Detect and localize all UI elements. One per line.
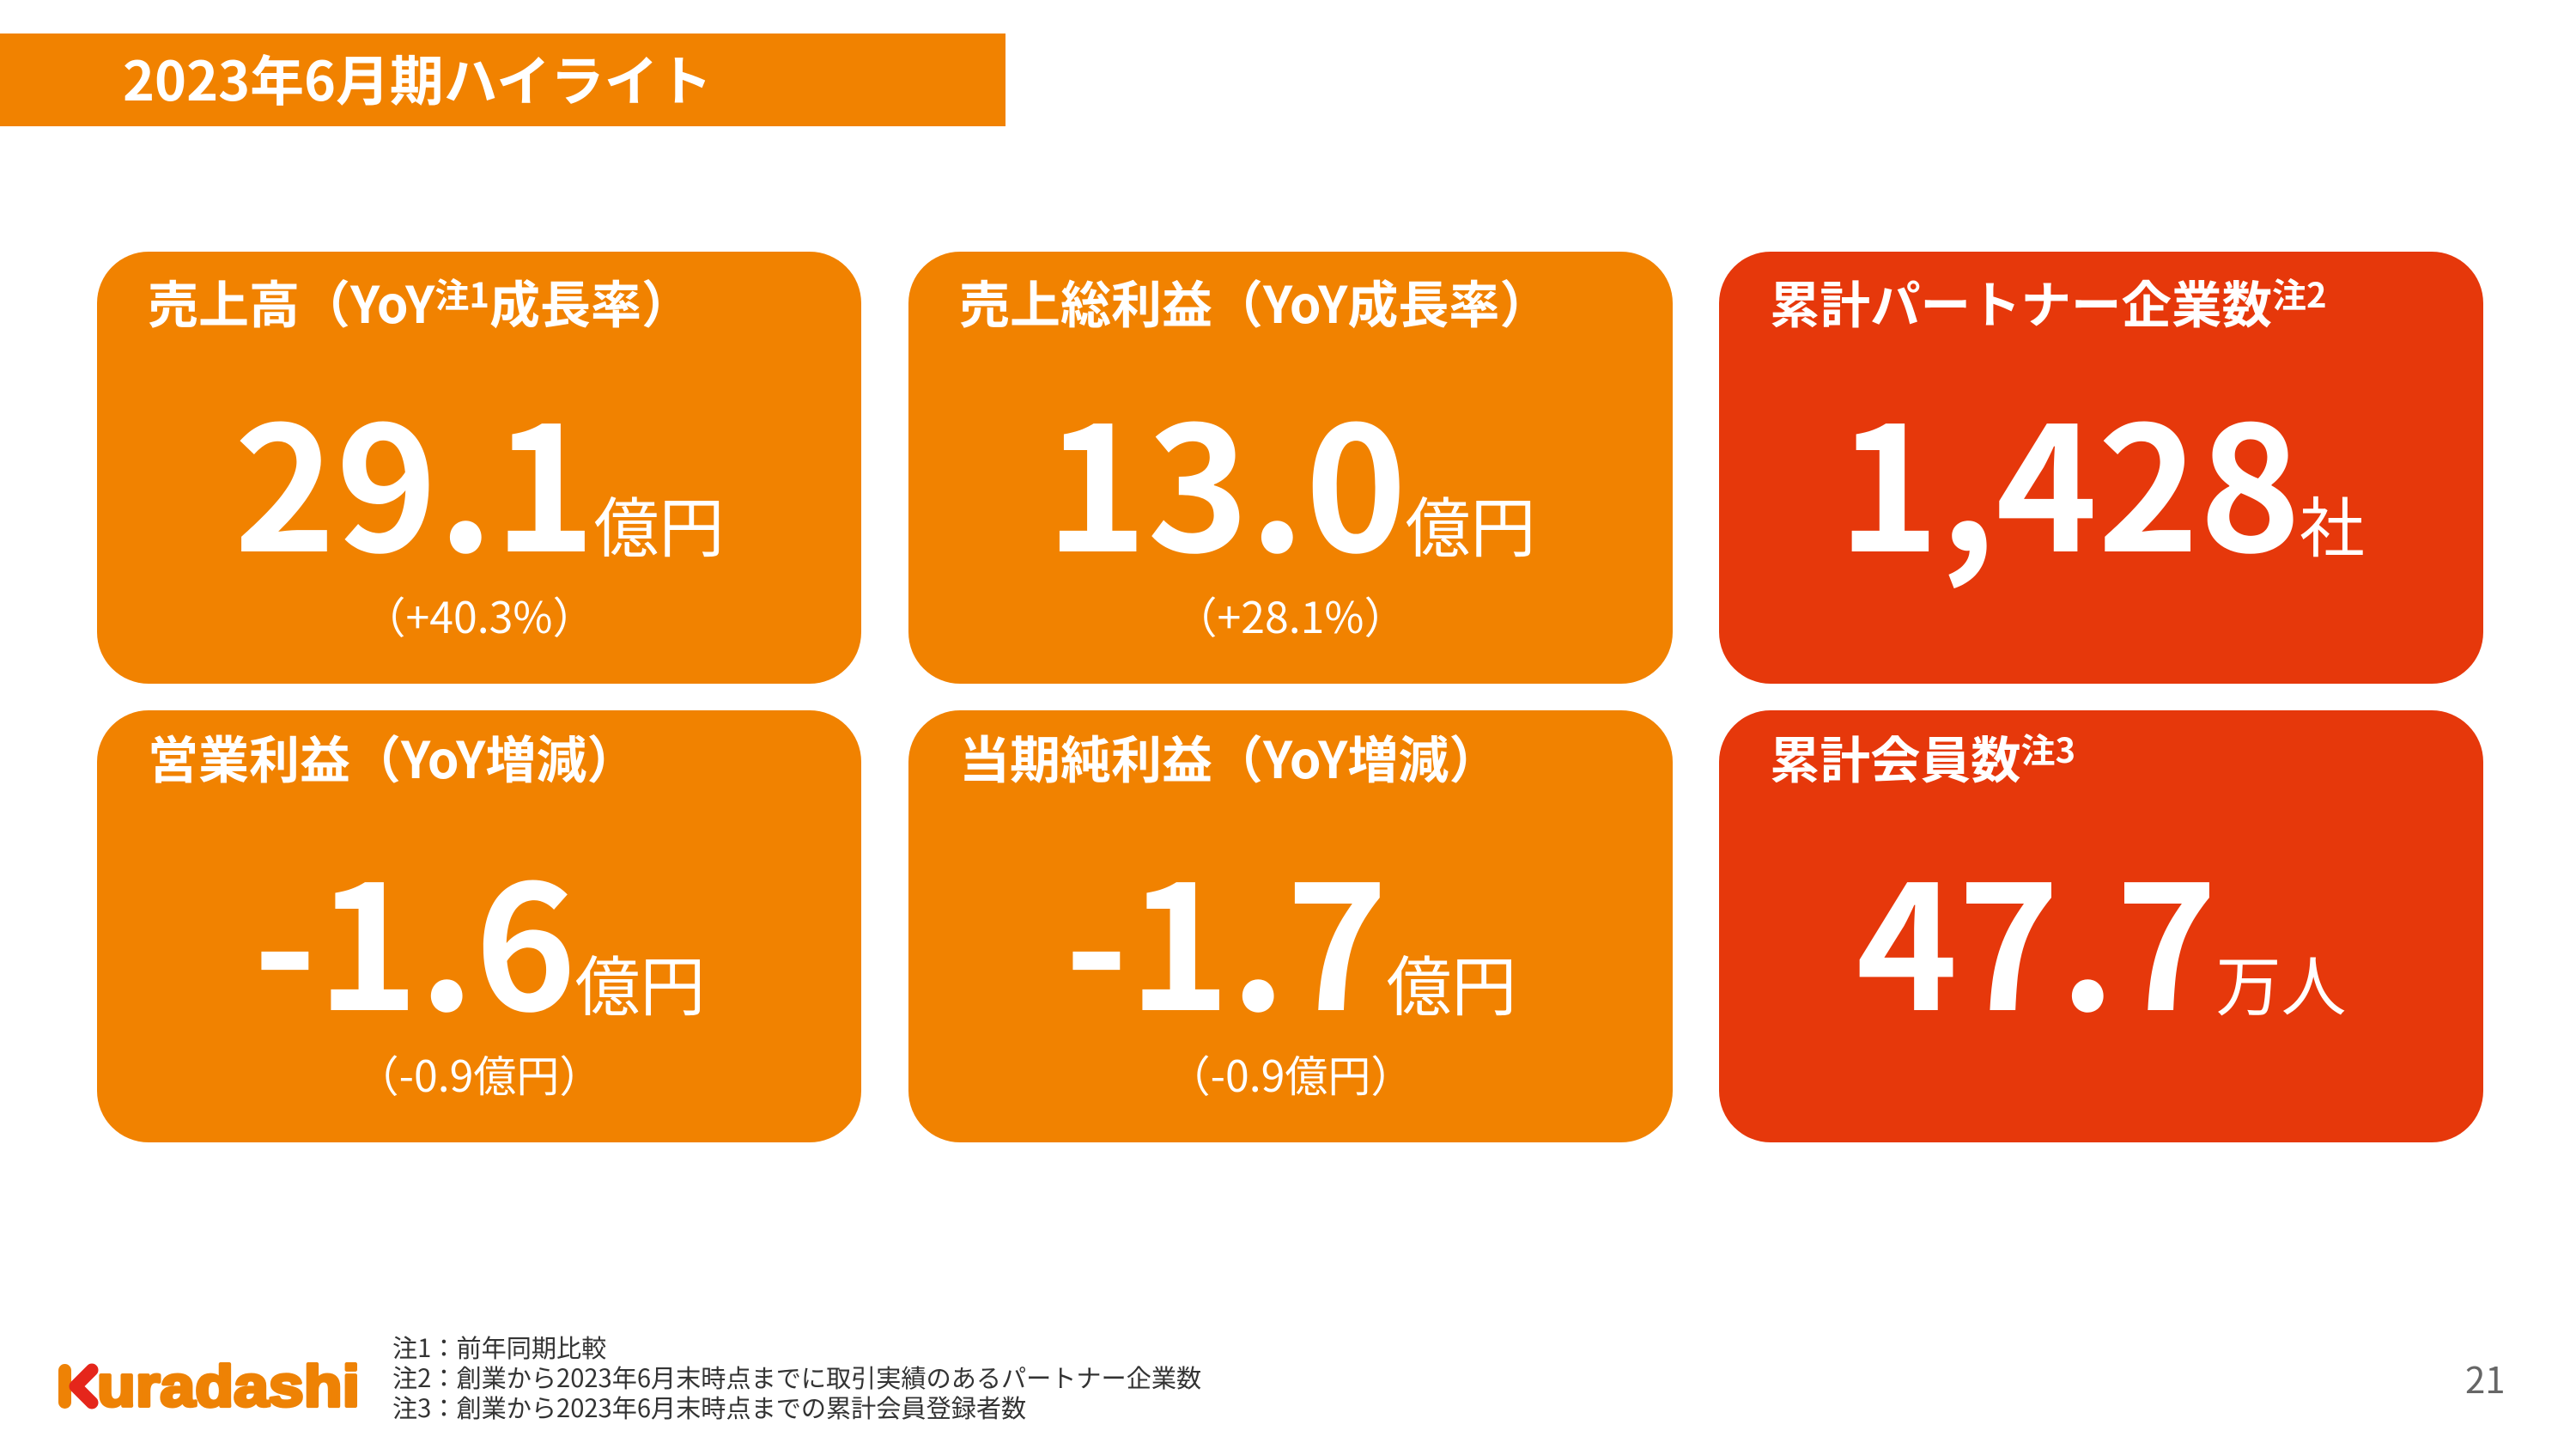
change: （+28.1%）	[1175, 584, 1406, 646]
value: -1.7億円	[1065, 810, 1516, 1060]
panel: members	[1719, 710, 2483, 1142]
change: （+40.3%）	[363, 584, 595, 646]
title bar	[0, 33, 1005, 126]
value: 47.7万人	[1856, 810, 2347, 1060]
label: 売上高（YoY注1成長率）	[148, 265, 692, 338]
label: 累計パートナー企業数注2	[1770, 265, 2327, 338]
value: -1.6億円	[253, 810, 705, 1060]
panel: net profit	[908, 710, 1673, 1142]
panel: partners	[1719, 252, 2483, 684]
label: 累計会員数注3	[1770, 720, 2075, 793]
logo: Kuradashi: uradashi	[97, 1354, 360, 1419]
footnotes	[392, 1329, 1201, 1425]
footnotes: 注1：前年同期比較	[392, 1329, 606, 1365]
panel: sales	[97, 252, 861, 684]
panel: gross profit	[908, 252, 1673, 684]
change: （-0.9億円）	[356, 1043, 602, 1105]
page number: 21	[2465, 1352, 2506, 1404]
value: 29.1億円	[234, 351, 725, 601]
label: 当期純利益（YoY増減）	[959, 720, 1499, 793]
footnotes: 注2：創業から2023年6月末時点までに取引実績のあるパートナー企業数	[392, 1359, 1201, 1395]
title text: 2023年6月期ハイライト	[123, 39, 712, 117]
label: 売上総利益（YoY成長率）	[959, 265, 1550, 338]
value: 1,428社	[1838, 351, 2365, 601]
value: 13.0億円	[1045, 351, 1536, 601]
panel: operating profit	[97, 710, 861, 1142]
label: 営業利益（YoY増減）	[148, 720, 637, 793]
change: （-0.9億円）	[1168, 1043, 1413, 1105]
footnotes: 注3：創業から2023年6月末時点までの累計会員登録者数	[392, 1389, 1026, 1425]
